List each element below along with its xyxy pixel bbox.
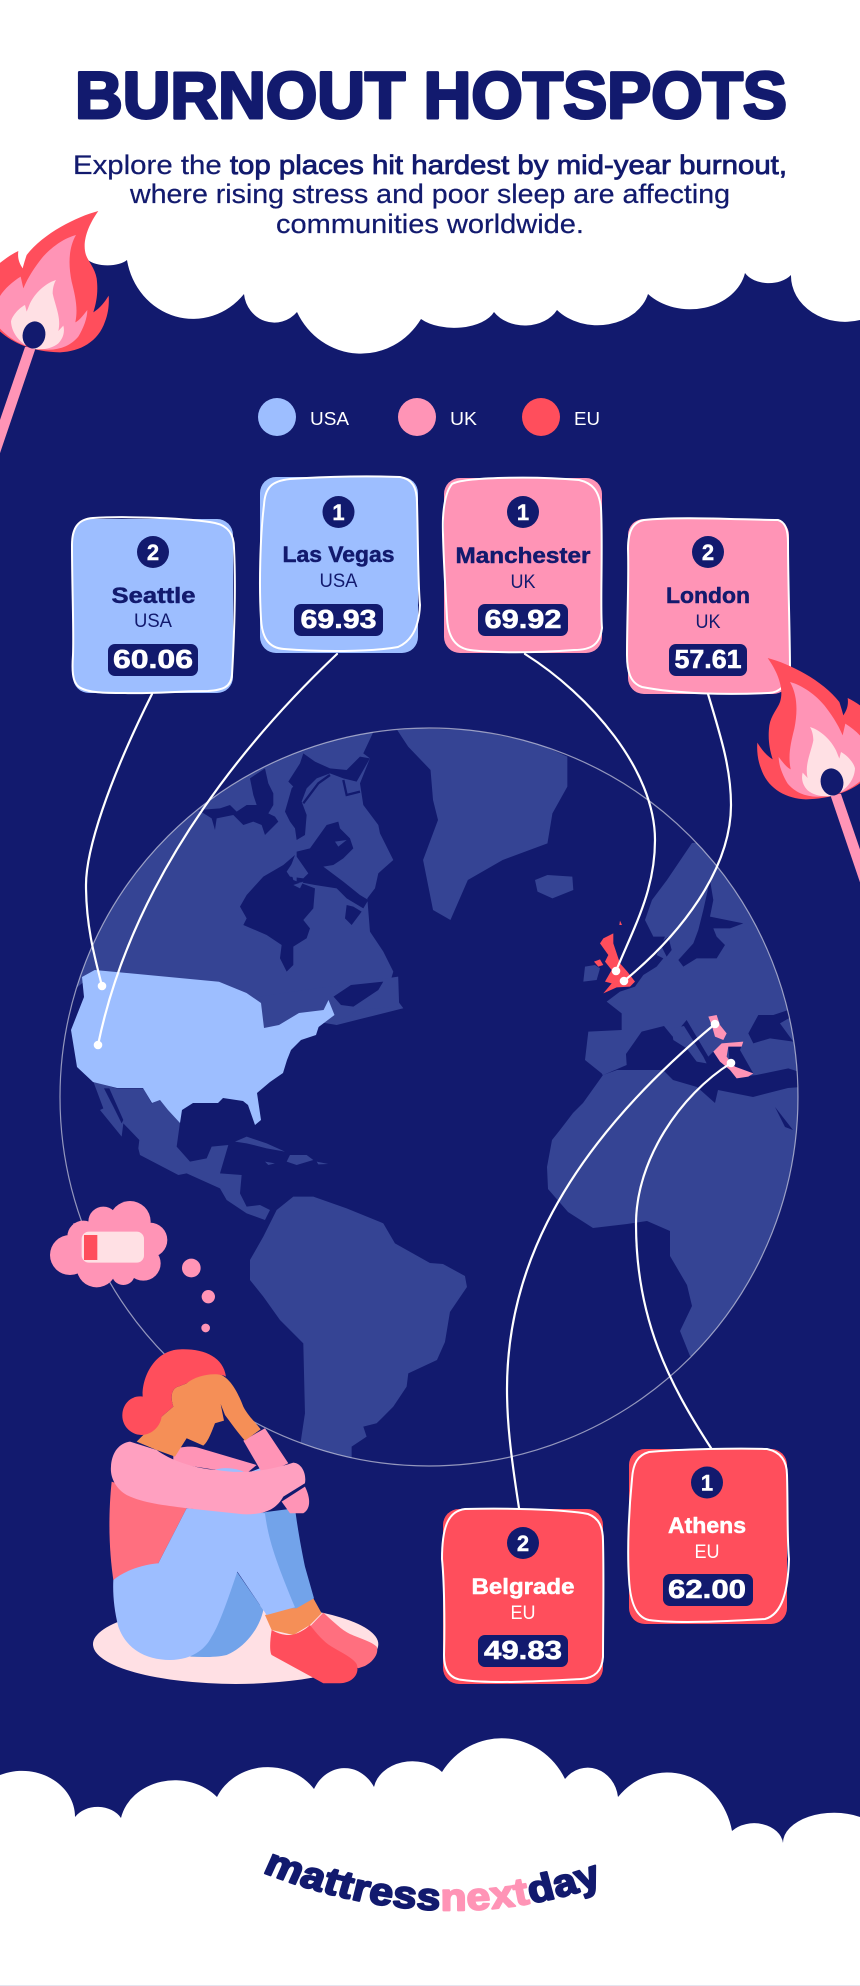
logo: mattressnextday: mattressnextday [264,1854,596,1912]
card: Seattle [72,517,235,693]
back calf [257,1508,314,1608]
card: Seattle: 60.06 [113,644,193,674]
baltic sea [678,880,743,967]
card: Athens: Athens [668,1513,746,1538]
land: Europe and Asia [583,842,797,1076]
legend item: USA: USA [310,409,349,429]
card: Athens: 62.00 [668,1574,746,1604]
north west passage [198,768,278,835]
bottom edge line [0,1985,860,1986]
card: Manchester: UK [510,572,536,593]
front arm [111,1442,305,1514]
card: Manchester: 69.92 [484,604,562,634]
card: Athens [628,1449,789,1624]
card: London: London [666,583,750,608]
trousers [113,1508,295,1660]
Hudson Bay [240,855,315,972]
card: Athens: 1 [701,1470,713,1496]
floor shadow [93,1605,378,1684]
land: Greenland and Iceland [397,728,573,920]
black sea [748,1010,793,1043]
land: Mexico, Central America and Caribbean [93,1082,328,1220]
icon: battery [82,1232,144,1263]
card: Seattle: USA [134,611,172,632]
connector: Seattle [86,694,152,990]
card: Athens: EU [694,1542,720,1563]
land: South America [250,1197,467,1480]
red sea [775,1107,793,1130]
legend item: UK: UK [450,409,477,429]
card: London: 57.61 [674,644,742,674]
land: Africa [547,1070,798,1356]
card: London [627,518,790,694]
torso [109,1482,187,1580]
card: Seattle: Seattle [112,583,196,608]
illustration: seated woman [93,1349,378,1684]
channel north of Baffin [285,753,370,840]
card: Manchester: Manchester [456,543,591,568]
card: Belgrade: Belgrade [472,1574,574,1599]
legend item: UK [398,398,477,436]
card: London: UK [696,612,721,633]
card: Las Vegas [260,476,420,653]
connector: Athens [636,1059,735,1448]
icon: burning match top left [0,211,109,459]
subtitle text: Explore the top places hit hardest by mid-year burnout, [73,150,787,180]
legend [258,398,600,436]
card: London: 2 [702,540,714,565]
illustration: thought cloud with low battery [50,1201,215,1332]
legend item: EU: EU [574,409,600,429]
highlighted countries: Serbia and Greece [708,1015,753,1078]
back leg shadow [190,1567,263,1657]
thought cloud [50,1201,167,1287]
connector: Belgrade [507,1020,719,1508]
card: Belgrade [442,1509,603,1684]
title: BURNOUT HOTSPOTS [75,58,787,132]
card: Las Vegas: Las Vegas [282,542,394,567]
land: Atlantic Canada [259,977,399,1030]
card: Belgrade: 2 [517,1531,529,1556]
highlighted country: USA [71,970,334,1125]
ankle [265,1598,322,1635]
card: Las Vegas: 1 [332,500,345,525]
subtitle text: where rising stress and poor sleep are affecting [129,179,730,209]
subtitle text: communities worldwide. [276,209,584,239]
subtitle text [73,150,787,239]
card: Belgrade: EU [510,1603,536,1624]
legend item: EU [522,398,600,436]
face and hand [137,1374,261,1457]
card: Las Vegas: USA [320,571,358,592]
card: Belgrade: 49.83 [484,1635,562,1665]
world map globe [30,725,860,1480]
connector: London [620,694,731,985]
connector: Las Vegas [94,654,337,1049]
Baffin Island inlets [303,775,360,803]
land: Canada [76,732,404,1025]
thought bubbles [182,1259,215,1332]
far arm [173,1447,257,1473]
Ungava Bay [345,905,362,925]
raised forearm [243,1428,288,1475]
bottom cloud [0,1738,860,1986]
card: Manchester [443,478,602,653]
card: Las Vegas: 69.93 [300,604,376,634]
aegean sea [728,1042,754,1074]
card: Manchester: 1 [517,500,529,525]
highlighted country: UK [594,921,635,993]
mediterranean sea [604,1020,798,1099]
hair [122,1349,226,1435]
front foot [270,1625,357,1683]
card: Seattle: 2 [147,540,159,565]
icon: burning match right [757,658,860,906]
lower hand [282,1487,309,1513]
globe outline [60,728,798,1466]
knee [213,1468,263,1477]
connector: Manchester [525,654,655,975]
legend item: USA [258,398,349,436]
Foxe basin [297,822,368,908]
top cloud [0,0,860,354]
back foot [310,1613,377,1668]
